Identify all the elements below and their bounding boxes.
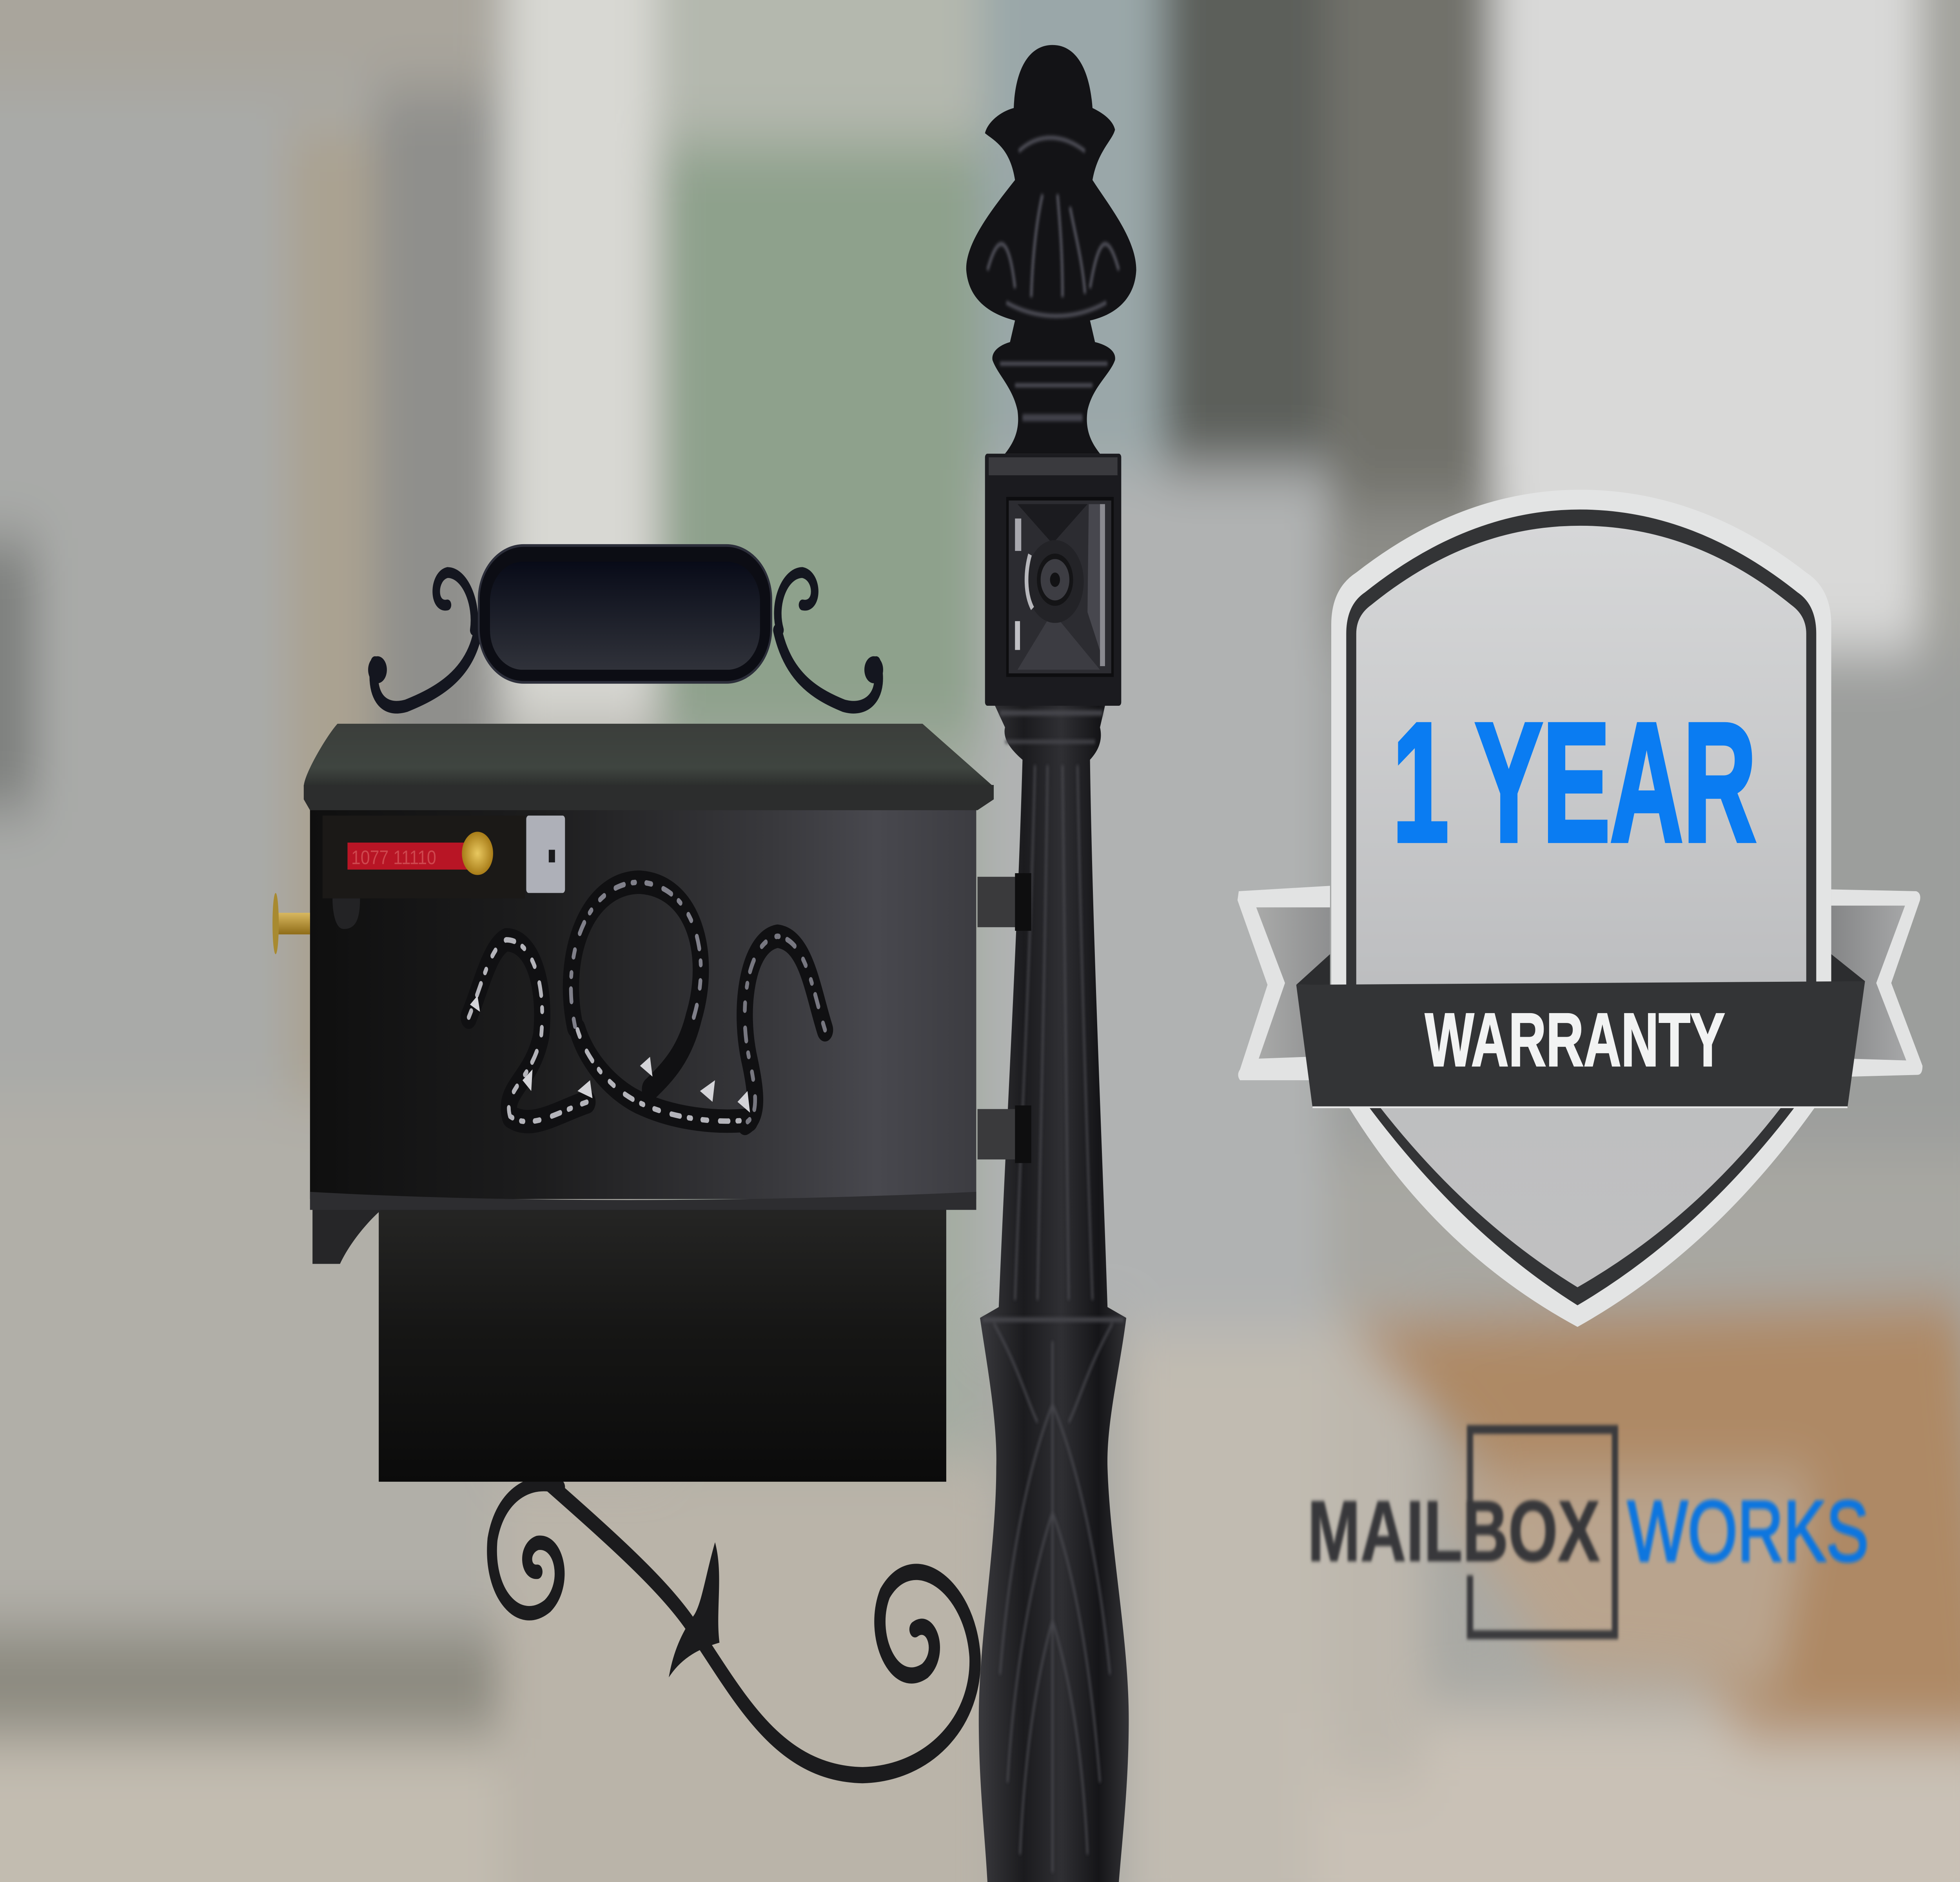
mailbox lower compartment [379, 1206, 946, 1482]
shield dark border [1346, 509, 1816, 1305]
band label: WARRANTY [1425, 998, 1725, 1082]
post finial [966, 45, 1136, 454]
mailbox post [966, 45, 1136, 1882]
ribbon tail left [1238, 886, 1330, 1080]
mailbox body [272, 724, 994, 1264]
flag slot [323, 816, 565, 929]
Mailbox Works logo [1307, 1430, 1869, 1635]
scroll support arm [492, 1480, 975, 1775]
headline: 1 YEAR: 1 YEAR [1392, 688, 1756, 877]
nameplate with scrolls [368, 545, 883, 707]
post square block [985, 454, 1121, 706]
mounting brackets [978, 873, 1031, 1163]
brass pin [272, 893, 310, 954]
serpent and wreath emblem [469, 882, 825, 1123]
Mailbox Works logo: WORKS [1628, 1483, 1869, 1580]
ribbon tail right [1831, 889, 1922, 1077]
warranty band [1296, 954, 1865, 1107]
Mailbox Works logo: MAILBOX [1307, 1483, 1600, 1580]
post shaft [979, 706, 1129, 1882]
shield outer rim [1331, 490, 1831, 1327]
shield inner panel [1356, 526, 1806, 1287]
flag slot: 1077 11110 [351, 847, 436, 869]
warranty badge [1238, 490, 1922, 1327]
mailbox lid [304, 724, 994, 810]
